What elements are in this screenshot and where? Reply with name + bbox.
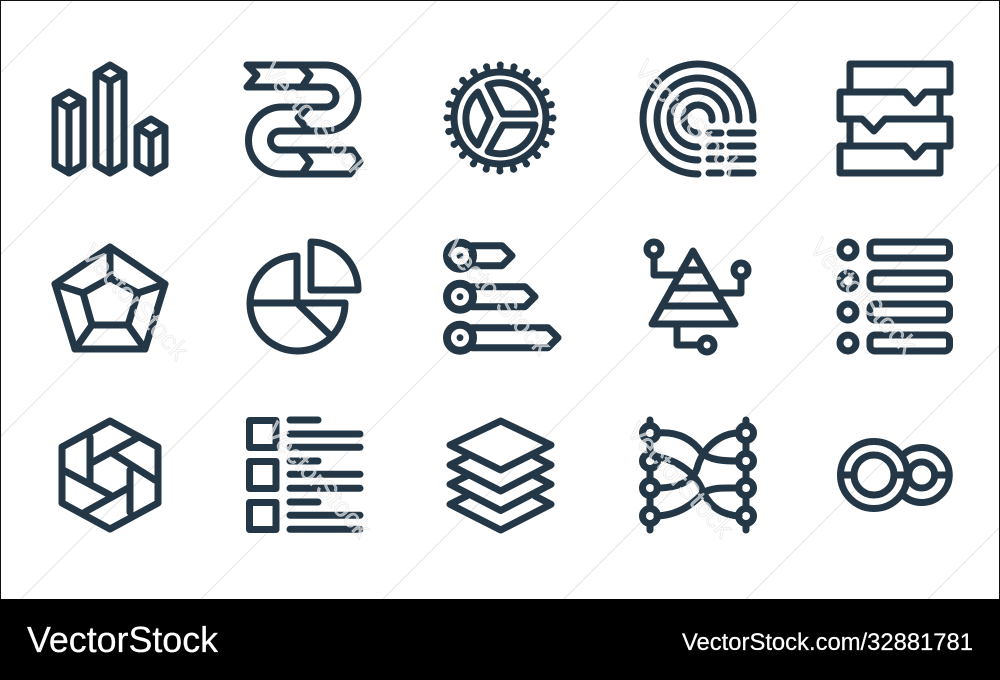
watermark text: VectorStock xyxy=(629,54,748,182)
watermark text: VectorStock xyxy=(259,416,378,544)
icon: checklist xyxy=(250,420,360,530)
footer bar xyxy=(0,599,1000,680)
icon: stacked layers xyxy=(450,421,551,530)
icon: pyramid with connected nodes xyxy=(647,242,748,352)
footer image id: VectorStock.com/32881781 xyxy=(682,629,973,656)
icon: pie chart xyxy=(250,242,358,351)
watermark text: VectorStock xyxy=(439,233,558,361)
watermark text: VectorStock xyxy=(621,416,740,544)
watermark text: VectorStock xyxy=(256,56,375,184)
watermark text: VectorStock xyxy=(76,238,195,366)
icon: radial arcs and bars chart xyxy=(643,64,753,174)
icon: node network crossover xyxy=(642,420,754,530)
icon: hexagon aperture xyxy=(62,421,158,529)
icon: bullet list xyxy=(840,242,950,351)
icon: pointer tag list xyxy=(447,243,558,351)
icon: stacked torn layers xyxy=(840,64,950,173)
icon: pentagon radar chart xyxy=(55,247,165,349)
icon: gear with three segments xyxy=(447,65,553,171)
icon: linked double rings xyxy=(840,442,949,508)
footer brand name: VectorStock xyxy=(27,619,219,660)
icon: 3D bar chart xyxy=(55,65,165,173)
watermark text: VectorStock xyxy=(804,232,923,360)
icon: winding ribbon arrow xyxy=(247,65,360,174)
watermark text xyxy=(76,54,923,544)
